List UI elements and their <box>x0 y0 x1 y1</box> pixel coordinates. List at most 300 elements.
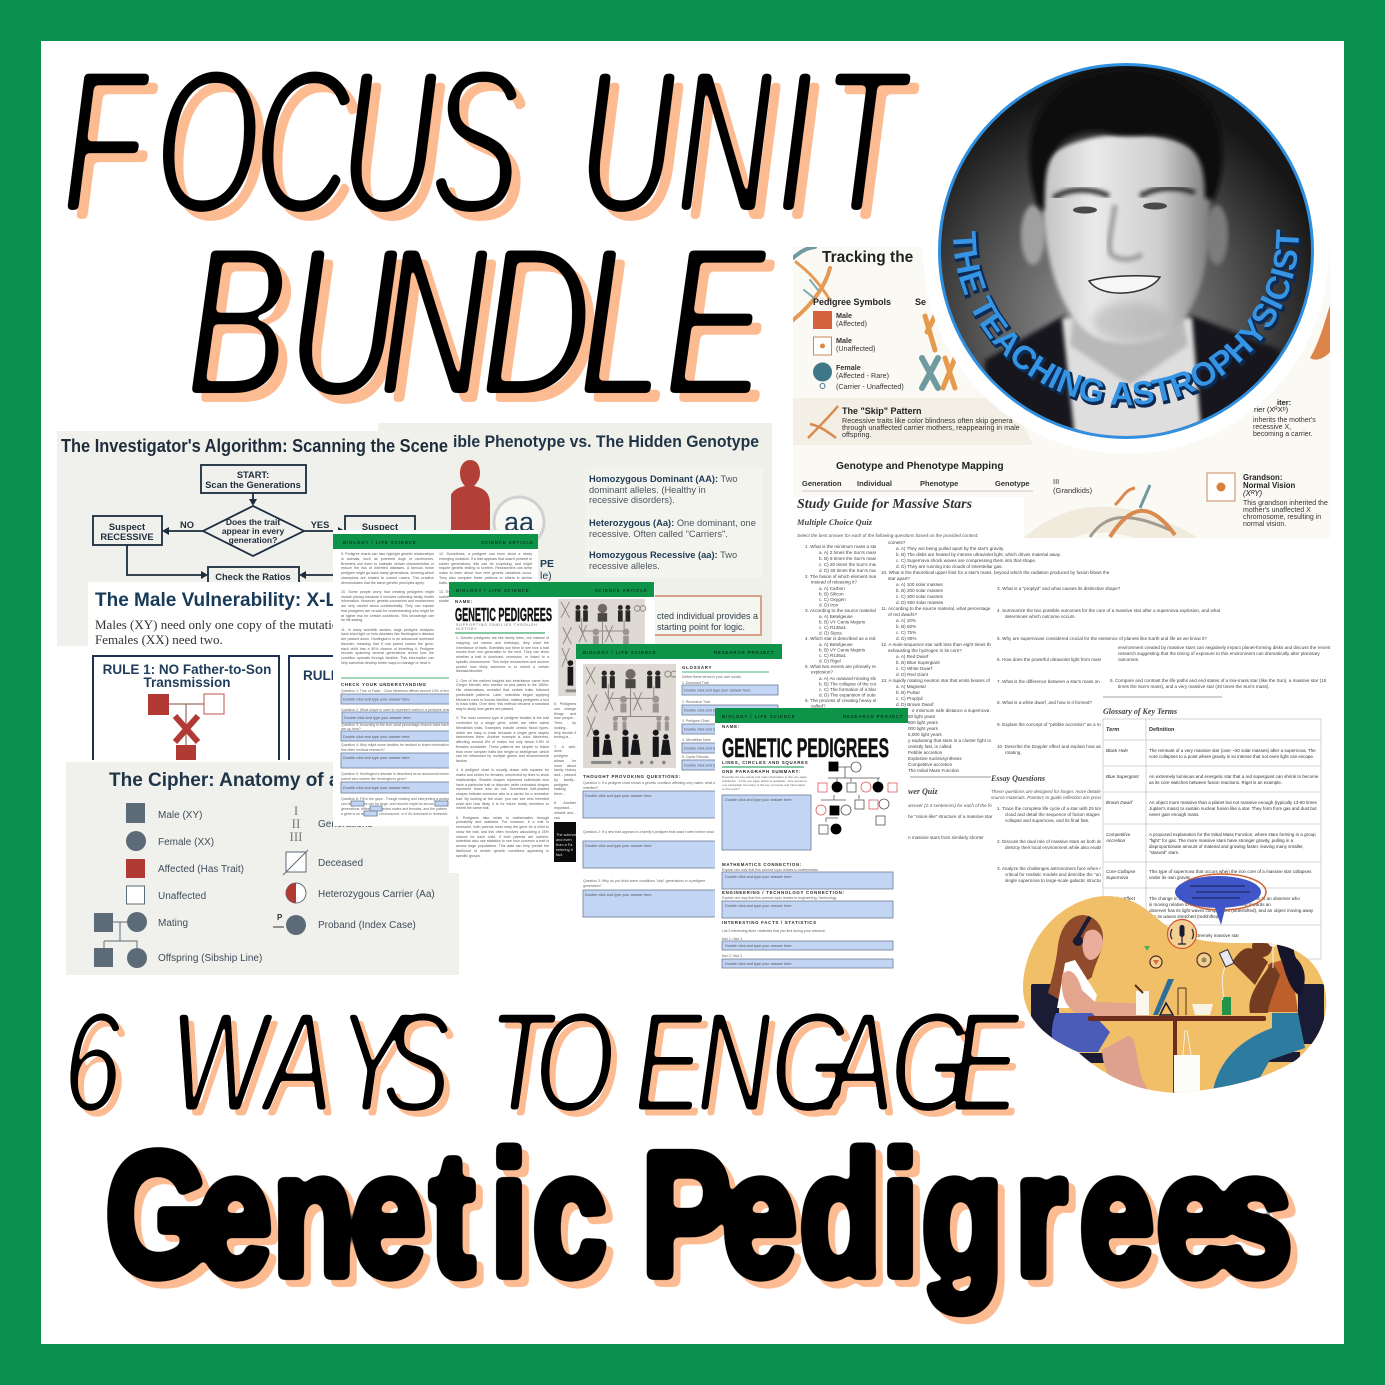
card: allele definitions: Homozygous Recessive (aa): Two <box>589 550 737 560</box>
check your understanding questions: Double click and type your answer here. <box>343 698 411 702</box>
quiz column 1: c. C) 20 times the Sun's mass <box>819 562 881 567</box>
short answer and essay questions clipped: destroy their local environment while also enabling new star formation <box>1005 845 1147 850</box>
label: III grandkids <box>1053 477 1093 495</box>
quiz column 2 top lines <box>881 540 1110 581</box>
header bar <box>715 708 908 723</box>
table: glossary: Accretion <box>1105 838 1126 843</box>
table: glossary: This type of supernova that occurs when the iron core of a massive star collapses <box>1149 869 1312 874</box>
quiz column 2: Pebble accretion <box>908 750 943 755</box>
box: rule 1: RULE 1: NO Father-to-Son <box>103 662 271 677</box>
quiz column 1: 3. According to the source material, which <box>805 608 890 613</box>
legend: symbols right: I <box>294 803 298 818</box>
short answer quiz fragment: answer (2-3 sentences) for each of the fo <box>908 803 992 808</box>
short answer and essay questions clipped: 3. Analyze the challenges astronomers face when modeling stellar feedback <box>997 866 1152 871</box>
panel: science article page 1 <box>333 530 538 826</box>
quiz column 2 top lines: d. D) They are running into clouds of interstellar gas. <box>896 564 1003 569</box>
table: glossary: A proposed explanation for the Initial Mass Function, where stars forming in a group <box>1149 832 1316 837</box>
flowchart: scan the generations: NO <box>180 520 194 530</box>
title: 6 ways to engage: 6 WAYS TO ENGAGE <box>64 984 1021 1142</box>
card: allele definitions: recessive alleles. <box>589 561 660 571</box>
fun fact black box <box>554 822 578 862</box>
glossary: 2. Recessive Trait <box>682 700 710 704</box>
table: glossary: as its core switches between fusion reactions. Rigel is an example. <box>1149 780 1282 785</box>
speech bubble <box>1175 874 1266 925</box>
panel: science article page 2: GENETIC PEDIGREES <box>455 604 552 625</box>
heading: genotype and phenotype mapping: Genotype and Phenotype Mapping <box>836 461 1004 472</box>
table: glossary: The change in wave frequency or wavelength in relation to an observer who <box>1149 896 1300 901</box>
short answer quiz fragment: he "onion-like" structure of a massive star <box>908 814 993 819</box>
legend: pedigree symbols: Se <box>915 297 926 307</box>
quiz column 1: b. B) VY Canis Majoris <box>819 648 866 652</box>
legend: symbols left: Unaffected <box>158 891 206 902</box>
thought provoking questions: THOUGHT PROVOKING QUESTIONS: <box>583 774 681 779</box>
quiz column 2: The Initial Mass Function <box>908 768 960 773</box>
left woman <box>1048 915 1152 1096</box>
glossary: Define these terms in your own words: <box>682 675 742 679</box>
check your understanding questions: parent who carries the Huntington's gene? <box>341 777 407 781</box>
one paragraph summary: Describe the key points and main information in this one page <box>722 775 807 779</box>
table: glossary: Blue Supergiant <box>1106 774 1139 779</box>
article text under image <box>554 702 576 820</box>
grandson symbol and text <box>1207 473 1328 528</box>
heading: male vulnerability: The Male Vulnerability: X-Linked <box>95 590 387 611</box>
card: allele definitions <box>585 468 763 578</box>
heading: glossary of key terms: Glossary of Key Terms <box>1103 707 1177 716</box>
quiz column 2 top lines: star apart? <box>888 576 910 581</box>
table: glossary: Competitive <box>1106 832 1131 837</box>
quiz column 2: c. C) White Dwarf <box>896 666 933 671</box>
heading: Tracking the: Tracking the <box>822 249 914 266</box>
quiz column 2: b. B) 200 solar masses <box>896 588 944 593</box>
fun fact black box: fact. <box>556 853 563 857</box>
flowchart: scan the generations: Check the Ratios <box>215 572 291 582</box>
table: glossary: is moving relative to the source; an object moving towards an <box>1149 902 1271 907</box>
text: phenotype fragment: le) <box>540 570 552 582</box>
heading: study guide for massive stars: Study Guide for Massive Stars <box>797 497 973 512</box>
blue ring <box>941 66 1311 436</box>
panel: investigator's algorithm slide <box>57 431 451 646</box>
legend: symbols left: Male (XY) <box>158 810 202 821</box>
table: glossary: Core-Collapse <box>1106 869 1136 874</box>
flowchart: scan the generations <box>93 465 415 585</box>
short answer and essay questions clipped: collapse and supernova, and its final fate. <box>1005 818 1090 823</box>
check your understanding questions: CHECK YOUR UNDERSTANDING <box>341 682 427 687</box>
engineering connection: Double click and type your answer here. <box>725 904 793 908</box>
table: glossary: Brown Dwarf <box>1106 800 1133 805</box>
box: rule 2 <box>289 656 399 766</box>
glossary: Double click and type your answer here. <box>684 688 752 692</box>
check your understanding questions: Double click and type your answer here. <box>344 716 412 720</box>
quiz column 1: b. B) 8 times the Sun's mass <box>819 556 878 561</box>
short answer and essay questions clipped: single supernova to large-scale galactic structures. <box>1005 878 1108 883</box>
quiz column 2: Explosive nucleosynthesis <box>908 756 962 761</box>
quiz column 2 top lines: 10. What is the theoretical upper limit for a star's mass, beyond which the radiation produced by fusion blows the <box>881 570 1110 575</box>
table: glossary: Black Hole <box>1106 748 1128 753</box>
quiz column 2: onsistly fast, is called: <box>908 744 952 749</box>
quiz column 1: 5. What two events are primarily responsible for <box>805 664 902 669</box>
quiz column 2: a. A) 100 solar masses <box>896 582 943 587</box>
card: allele definitions: Homozygous Dominant (AA): Two <box>589 474 738 484</box>
right column essay text: research suggesting that the timing of exposure to this environment can dramatically alter planetary <box>1118 651 1320 656</box>
short answer and essay questions clipped: 8. What is a white dwarf, and how is it formed? <box>997 700 1092 705</box>
flowchart: scan the generations: generation? <box>229 535 277 545</box>
label: III grandkids: III <box>1053 477 1059 486</box>
curved name shadow <box>953 232 1299 405</box>
grandson symbol and text: Normal Vision <box>1243 481 1296 490</box>
title: bundle: BUNDLE <box>195 212 777 450</box>
quiz column 1: a. A) Betelgeuse <box>819 642 853 647</box>
article subtitle: SUPPORTING FAMILIES THROUGH <box>456 623 538 627</box>
flowchart: scan the generations: YES <box>311 520 329 530</box>
quiz column 2 <box>881 582 1019 773</box>
quiz column 2: b. B) 50% <box>896 624 916 629</box>
header bar: SCIENCE ARTICLE <box>595 588 648 593</box>
glossary: 5. Cystic Fibrosis <box>682 755 709 759</box>
title: 6 ways to engage: 6 WAYS TO ENGAGE <box>70 990 1027 1148</box>
quiz column 1: b. B) The collapse of the core <box>819 682 879 686</box>
hearts and icons <box>1144 946 1211 968</box>
check your understanding questions: generations, different of affected males and females, and the pattern <box>341 807 447 811</box>
header bar <box>576 644 782 659</box>
title: genetic pedigrees: Genetic Pedigrees <box>105 1116 1292 1313</box>
one paragraph summary: Double click and type your answer here. <box>725 798 793 802</box>
right column essay text: outcomes. <box>1118 657 1139 662</box>
header bar <box>449 582 654 597</box>
glossary <box>682 665 778 770</box>
legend: symbols right <box>273 803 435 935</box>
article text <box>456 636 549 868</box>
short answer and essay questions clipped: 10. Describe the Doppler effect and explain how astronomers use it to <box>997 744 1139 749</box>
glossary: 3. Pedigree Chart <box>682 719 709 723</box>
text: phenotype fragment: PE <box>540 558 554 570</box>
text: phenotype fragment <box>540 558 554 582</box>
quiz column 2: d. D) 500 solar masses <box>896 600 944 605</box>
grandson symbol and text: normal vision. <box>1243 521 1286 528</box>
quiz column 1: c. C) Oxygen <box>819 597 846 602</box>
quiz column 1: a. A) An outward-moving shockwave <box>819 676 893 681</box>
name label: NAME: <box>455 599 473 604</box>
quiz column 2 top lines: b. B) The disks are heated by intense ultraviolet light, which drives material away. <box>896 552 1061 557</box>
article text: 1. Genetic pedigrees are like family trees, but instead of mapping out names and birthdays, they chart the inheritance of traits. Scientists use them to see how a trait moves from one generation to the next. They can show whether a trait is dominant, recessive, or linked to a specific chromosome. This helps researchers and doctors predict how likely someone is to inherit a certain disease/disorder. <box>456 636 549 673</box>
thought provoking questions <box>583 774 783 917</box>
check your understanding questions: Question 6: Fill in the gaps - Though reading and interpreting a pedigree <box>341 797 453 801</box>
flowchart: scan the generations: Suspect <box>362 522 398 532</box>
table: glossary: Term <box>1106 727 1119 733</box>
article text right column <box>439 552 532 676</box>
interesting facts: List 3 interesting facts / statistics that you find during your research <box>722 929 825 933</box>
right column essay text: times the Sun's mass), and a very massive star (40 times the Sun's mass). <box>1118 684 1270 689</box>
icon: DNA decoration bottom <box>1030 485 1190 550</box>
engineering connection: ENGINEERING / TECHNOLOGY CONNECTION: <box>722 890 845 895</box>
table: glossary <box>1103 719 1321 959</box>
table: glossary: "starved" stars. <box>1149 850 1179 855</box>
panel: research project page 2 <box>715 708 908 968</box>
panel: study guide page <box>793 497 1333 973</box>
heading: visible phenotype: ible Phenotype vs. The Hidden Genotype <box>453 433 759 451</box>
thought provoking questions: Question 2: If a new trait appears in a family's pedigree that wasn't seen before what might explain it? <box>583 830 740 834</box>
short answer quiz fragment: wer Quiz <box>908 787 938 796</box>
legend: symbols left <box>94 803 262 968</box>
article text under image: 7. A well-done pedigree allows for more about family history and... passed by family... pedigree, making them... <box>554 744 576 796</box>
subheading: multiple choice quiz: Multiple Choice Quiz <box>796 517 873 527</box>
short answer and essay questions clipped: source materials. Pointers to guide reflection are provided below for each <box>991 795 1140 800</box>
legend: symbols right: Heterozygous Carrier (Aa) <box>318 889 435 900</box>
legend: symbols right: Proband (Index Case) <box>318 920 416 931</box>
title: genetic pedigrees: Genetic Pedigrees <box>112 1123 1299 1320</box>
legend: symbols right: III <box>290 829 302 844</box>
name label: NAME: <box>722 724 740 729</box>
quiz column 2: 12. A main-sequence star with less than eight times the Sun's mass <box>881 642 1019 647</box>
short answer questions: 3. What is a "proplyd" and what causes its distinctive shape? <box>997 586 1121 591</box>
thought provoking questions: Question 3: Why do you think some conditions "skip" generations in a pedigree <box>583 879 705 883</box>
short answer and essay questions clipped: critical for realistic models and describe the "unsolved" link from a <box>1005 872 1139 877</box>
quiz column 1: c. C) R136a1 <box>819 653 847 658</box>
quiz column 1: a. A) Carbon <box>819 586 845 591</box>
quiz column 1: 2. The fusion of which element marks the end <box>805 574 898 579</box>
table: glossary: observer has its light waves compressed (blueshifted), and an object moving away <box>1149 908 1314 913</box>
engineering connection <box>722 890 893 918</box>
one paragraph summary: on the topic? <box>722 787 740 791</box>
thought provoking questions: Double click and type your answer here. <box>585 794 653 798</box>
check your understanding questions: a gene is on an or the X chromosome, or if it's dominant or recessive <box>341 812 448 816</box>
quiz column 2: c. C) 75% <box>896 630 916 635</box>
glossary: Double click and type your answer here. <box>684 746 752 750</box>
scene clipped to blob <box>1031 914 1324 1096</box>
interesting facts: Double click and type your answer here. <box>725 962 793 966</box>
interesting facts: fact 2 / fact 2 <box>722 954 742 958</box>
interesting facts <box>722 920 893 968</box>
check your understanding questions: Question 5: Huntington's disease is described as an autosomal dominant <box>341 772 454 776</box>
legend: pedigree symbols: Pedigree Symbols <box>813 297 891 307</box>
grandson symbol and text: Grandson: <box>1243 473 1282 482</box>
panel: male vulnerability slide <box>88 582 387 760</box>
panel: the skip pattern <box>793 398 1033 445</box>
article text left column: 9. Pedigree charts can also highlight genetic relationships in animals, such as purebred dogs or racehorses. Breeders use them to maintain certain characteristics or reduce the risk of inherited diseases. A famous horse pedigree might go back many generations, showing which champions are related to current racers. This practice demonstrates that the same genetic principles apply. <box>341 552 434 584</box>
quiz column 2: d. D) Red Giant <box>896 672 929 677</box>
short answer and essay questions clipped: 7. What is the difference between a star's mass on the main sequence and <box>997 679 1149 684</box>
box: rule 2: RULE 2 <box>303 668 351 683</box>
table: glossary: under its own gravity. <box>1149 875 1191 880</box>
short answer quiz fragment: n massive stars from similarly shorter <box>908 835 984 840</box>
legend: pedigree symbols: (Affected - Rare) <box>836 371 889 380</box>
callout: starting point for logic <box>640 596 761 635</box>
microphone badge <box>1168 920 1196 948</box>
flowchart: scan the generations: appear in every <box>222 526 284 536</box>
quiz column 1: a. A) Betelgeuse <box>819 614 853 619</box>
mathematics connection <box>722 862 893 889</box>
icon: orange cell decoration <box>1310 305 1330 360</box>
panel: the skip pattern: through unaffected carrier mothers, reappearing in male <box>842 423 1020 432</box>
legend: symbols left: Mating <box>158 918 188 929</box>
article text: 4. A pedigree chart is usually drawn with squares for males and circles for females, connected by lines to show relationships. Shaded shapes represent individuals who have a particular trait or disorder, while unshaded shapes represent those who do not. Sometimes half-shaded shapes indicate someone who is a carrier for a recessive trait. By looking at the chart, you can see who inherited what and how likely it is for future family members to inherit the same trait. <box>456 768 549 810</box>
icon: chromosomes <box>922 316 955 388</box>
quiz column 2: 11. According to the source material, what percentage of all stars <box>881 606 1013 611</box>
legend: symbols left: Affected (Has Trait) <box>158 864 244 875</box>
article text left column <box>341 552 434 676</box>
title: focus unit: FOCUS UNIT <box>62 28 912 256</box>
article text left column: 10. Some people worry that creating pedigrees might invade privacy because it involves collecting family health information. However, genetic counselors and researchers are very careful about confidentiality. They can explain that pedigrees are crucial for understanding who might be at higher risk for certain conditions. This knowledge can be life-saving. <box>341 590 434 622</box>
check your understanding questions: Double click and type your answer here. <box>343 735 411 739</box>
label: III grandkids: (Grandkids) <box>1053 486 1093 495</box>
quiz column 2: Competitive accretion <box>908 762 953 767</box>
engineering connection: Explain one way that this science topic relates to engineering / technology <box>722 896 837 900</box>
table: glossary: Supernova <box>1106 875 1129 880</box>
title: focus unit: FOCUS UNIT <box>71 37 921 265</box>
quiz column 2: a. A) Red Dwarf <box>896 654 929 659</box>
right woman <box>1213 943 1305 1088</box>
image: pedigree collage <box>583 664 677 768</box>
short answer questions <box>997 586 1221 641</box>
short answer questions: 4. Summarize the two possible outcomes for the core of a massive star after a supernova explosion, and what <box>997 608 1221 613</box>
panel: the skip pattern: offspring. <box>842 430 871 439</box>
panel: visible phenotype vs hidden genotype slide <box>378 423 772 644</box>
check your understanding questions: this often medical research? <box>341 748 385 752</box>
left chair <box>1031 984 1104 1063</box>
quiz column 2: c. C) 300 solar masses <box>896 594 944 599</box>
quiz column 2: a. A) 10% <box>896 618 916 623</box>
right column essay text: 5. Compare and contrast the life paths and end states of a low-mass star (like the Sun), a massive star (15 <box>1110 678 1327 683</box>
panel: research project page 1 <box>576 644 782 918</box>
quiz column 2: b. B) Blue Supergiant <box>896 660 940 665</box>
quiz column 1 <box>805 544 902 708</box>
quiz column 2: b. B) Pulsar <box>896 690 920 695</box>
quiz column 2: c. C) Proplyd <box>896 696 923 701</box>
thought provoking questions: Question 1: If a pedigree chart shows a genetic condition affecting only males, what does that tell you about <box>583 781 750 785</box>
flowchart: scan the generations: START: <box>237 470 269 480</box>
legend: symbols left: Female (XX) <box>158 837 214 848</box>
quiz column 2: 500 light years <box>908 720 939 725</box>
icon: magnifier with aa <box>494 497 544 547</box>
quiz column 1: called? <box>811 704 826 708</box>
mathematics connection: MATHEMATICS CONNECTION: <box>722 862 802 867</box>
article text: 3. The most common type of pedigree studied is the trait controlled by a single gene, which are often called Mendelian traits. Examples include certain blood types, which are easy to track because a single gene largely determines them. Another example is color blindness, affecting around 8% of males but only about 0.5% of females worldwide. These patterns are simpler to follow than more complex traits like height or intelligence, which can be influenced by multiple genes and environmental factors. <box>456 716 549 763</box>
table header: generation, individual, phenotype, genotype: Generation <box>802 479 842 488</box>
right column essay text <box>1110 645 1331 689</box>
table header: generation, individual, phenotype, genotype: Individual <box>857 479 892 488</box>
article text right column: 13. The design of pedigree charts can be adapted to help scientists share data across many different types of studies and research groups. <box>439 590 532 603</box>
flowchart: scan the generations: RECESSIVE <box>100 532 154 542</box>
quiz column 2: 13. A rapidly rotating neutron star that emits beams of X-rays is <box>881 678 1010 683</box>
check your understanding questions: Double click and type your answer here. <box>343 786 411 790</box>
legend: pedigree symbols: (Carrier - Unaffected) <box>836 382 904 391</box>
grandson symbol and text: mother's unaffected X <box>1243 507 1311 514</box>
article subtitle: HISTORY <box>456 627 477 631</box>
glossary: Double click and type your answer here. <box>684 708 752 712</box>
legend: pedigree symbols: Female <box>836 363 861 372</box>
daughter text: recessive X, <box>1253 424 1291 431</box>
legend: symbols right: II <box>292 816 300 831</box>
article image: pedigree collage <box>558 599 646 696</box>
project subtitle: LINES, CIRCLES AND SQUARES <box>722 760 808 765</box>
quiz column 2: y explaining that stars in a cluster fight over <box>908 738 997 743</box>
tablet cup bowl drinks <box>1135 979 1231 1015</box>
legend: pedigree symbols: Male <box>836 311 852 320</box>
table: glossary: An extremely luminous and energetic star that a red supergiant can shrink to become <box>1149 774 1319 779</box>
check your understanding questions: are up here? <box>341 727 361 731</box>
box: rule 1: Transmission <box>143 675 231 690</box>
short answer and essay questions clipped: 6. How does the powerful ultraviolet light from massive stars affect nearby <box>997 657 1148 662</box>
table: glossary: Jupiter's mass) to sustain nuclear fusion like a star. They form from gas and dust but <box>1149 806 1317 811</box>
table header: generation, individual, phenotype, genotype: Genotype <box>995 479 1030 488</box>
icon: DNA strand top left <box>793 247 830 320</box>
legend: symbols left: Offspring (Sibship Line) <box>158 953 262 964</box>
short answer and essay questions clipped: rotating. <box>1005 750 1022 755</box>
short answer and essay questions clipped: These questions are designed for longer, more detailed responses based <box>991 789 1140 794</box>
grandson symbol and text: (XᴿY) <box>1243 489 1263 498</box>
quiz column 1: 4. Which star is described as a red supergiant? <box>805 636 901 641</box>
icon: magnifier with aa: aa <box>504 507 535 537</box>
flowchart: scan the generations: Suspect <box>109 522 145 532</box>
glossary: 4. Mendelian traits <box>682 738 711 742</box>
fun fact black box: and even <box>556 838 572 842</box>
quiz column 1: 6. The process of creating heavy elements is <box>805 698 897 703</box>
daughter text: rier (XᴿXᵇ) <box>1254 405 1289 414</box>
table: glossary: Definition <box>1149 727 1175 733</box>
callout: starting point for logic: starting point for logic. <box>657 622 745 632</box>
fun fact black box: from a Fa <box>556 843 573 847</box>
quiz column 2 top lines: comets? <box>888 540 906 545</box>
callout: starting point for logic: cted individual provides a <box>657 611 758 621</box>
flowchart: scan the generations: Scan the Generations <box>205 480 301 490</box>
legend: pedigree symbols: (Affected) <box>836 319 867 328</box>
white halo around portrait <box>923 48 1329 454</box>
daughter text <box>1253 398 1316 438</box>
short answer quiz fragment <box>908 787 993 840</box>
table: glossary: core collapses to a point where gravity is so intense that not even light can escape. <box>1149 754 1314 759</box>
legend: pedigree symbols <box>813 297 926 391</box>
quiz column 1: b. B) VY Canis Majoris <box>819 620 866 624</box>
quiz column 2: exhausting the hydrogen in its core? <box>888 648 962 653</box>
thought provoking questions: inherited? <box>583 786 598 790</box>
glossary: Double click and type your answer here. <box>684 764 752 768</box>
legend: symbols right: Deceased <box>318 858 363 869</box>
check your understanding questions: can be . Families can be large, and records might be across <box>341 802 434 806</box>
title: bundle: BUNDLE <box>186 203 768 441</box>
header bar: BIOLOGY / LIFE SCIENCE <box>456 588 530 593</box>
table: glossary: has its waves stretched (redshifted). <box>1149 914 1221 919</box>
thought provoking questions: Double click and type your answer here. <box>585 893 653 897</box>
panel: pedigree symbols slide (Tracking the...) <box>793 247 1330 538</box>
quiz column 1: a. A) 2 times the Sun's mass <box>819 550 878 555</box>
article text right column: 12. Sometimes, a pedigree can even show a newly emerging mutation. If a trait appears that wasn't present in earlier generations, this can be surprising, and might require genetic testing to confirm. Researchers can keep notes to learn about how new genetic variations occur. They also compare these patterns to others in similar traits, and study the traits. <box>439 552 532 584</box>
header bar: SCIENCE ARTICLE <box>481 540 534 545</box>
pedigree chart <box>816 762 897 834</box>
header bar: BIOLOGY / LIFE SCIENCE <box>722 714 796 719</box>
check your understanding questions: Double click and type your answer here. <box>343 756 411 760</box>
quiz column 1: c. C) The formation of a black hole <box>819 687 890 692</box>
quiz column 2: of red dwarfs? <box>888 612 918 617</box>
short answer and essay questions clipped: cloud and detail the sequence of fusion stages in the core through its final <box>1005 812 1155 817</box>
quiz column 1: b. B) Silicon <box>819 592 844 596</box>
table: glossary: "fight" for gas. The more massive stars have stronger gravity, pulling in a <box>1149 838 1294 843</box>
text: males and females: Males (XY) need only one copy of the mutation. <box>95 617 348 632</box>
table header: generation, individual, phenotype, genotype: Phenotype <box>920 479 958 488</box>
fun fact black box: entering it <box>556 848 574 852</box>
interesting facts: Double click and type your answer here. <box>725 944 793 948</box>
right column essay text: environment created by massive stars can negatively impact planet-forming disks and discuss the recent <box>1118 645 1331 650</box>
legend: symbols right: P <box>277 913 283 922</box>
text: males and females <box>95 617 348 647</box>
shopping bag <box>1174 1030 1200 1095</box>
table: glossary: disproportionate amount of material and growing faster, leaving many smaller, <box>1149 844 1304 849</box>
daughter text: becoming a carrier. <box>1253 431 1313 438</box>
quiz column 2 top lines: a. A) They are being pulled apart by the star's gravity. <box>896 546 1004 551</box>
quiz column 2: 50 light years <box>908 714 936 719</box>
card: allele definitions: recessive disorders). <box>589 495 675 505</box>
portrait: the teaching astrophysicist badge <box>938 63 1314 439</box>
legend: pedigree symbols: (Unaffected) <box>836 344 875 353</box>
table: glossary: An object more massive than a planet but not massive enough (typically 13-80 times <box>1149 800 1318 805</box>
